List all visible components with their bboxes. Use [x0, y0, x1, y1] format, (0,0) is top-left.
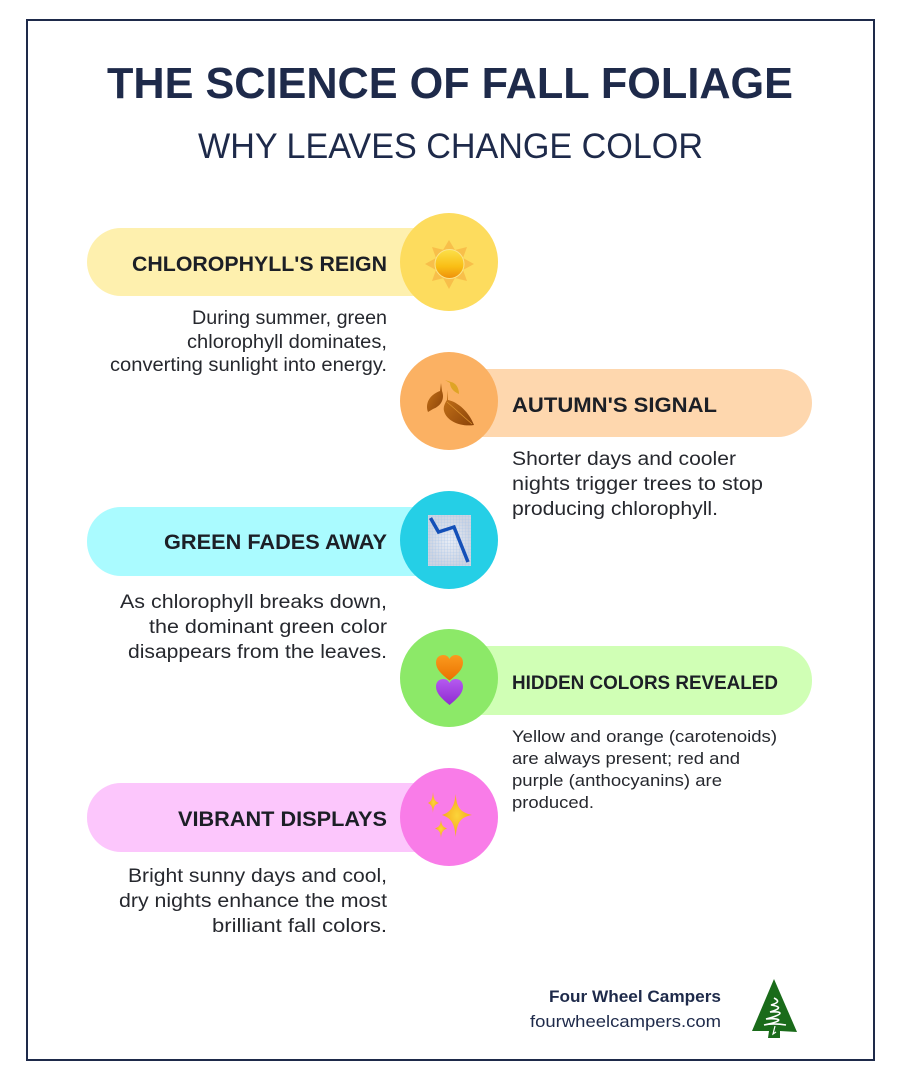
icon: sparkles [428, 792, 472, 838]
text: green fades away description: disappears from the leaves. [128, 642, 387, 663]
heading: vibrant displays: VIBRANT DISPLAYS [178, 808, 387, 831]
text: vibrant displays description [119, 866, 388, 937]
step 1: chlorophyll's reign [87, 213, 498, 376]
text: autumn's signal description: Shorter days and cooler [512, 449, 737, 470]
text: green fades away description: the dominant green color [149, 617, 388, 638]
text: hidden colors revealed description: are always present; red and [512, 749, 740, 768]
icon: fallen leaves [427, 380, 474, 425]
pill: vibrant displays [87, 783, 457, 852]
pill: hidden colors revealed [442, 646, 812, 715]
step 5: vibrant displays [87, 768, 498, 937]
icon: sun [425, 240, 474, 289]
text: chlorophyll's reign description: chlorophyll dominates, [187, 332, 387, 353]
icon: falling chart [428, 515, 471, 566]
circle: hearts badge [400, 629, 498, 727]
text: green fades away description [120, 592, 388, 663]
text: vibrant displays description: Bright sunny days and cool, [128, 866, 387, 887]
text: autumn's signal description [512, 449, 763, 520]
icon: orange and purple hearts [436, 655, 463, 705]
text: vibrant displays description: brilliant fall colors. [212, 916, 387, 937]
circle: sparkles badge [400, 768, 498, 866]
circle: chart badge [400, 491, 498, 589]
pill: green fades away [87, 507, 457, 576]
text: hidden colors revealed description: produced. [512, 793, 594, 812]
heading: green fades away: GREEN FADES AWAY [164, 531, 387, 554]
title: THE SCIENCE OF FALL FOLIAGE [107, 59, 793, 108]
heading: autumn's signal: AUTUMN'S SIGNAL [512, 394, 717, 417]
website: fourwheelcampers.com [530, 1012, 721, 1031]
pill: autumn's signal [442, 369, 812, 437]
circle: sun badge [400, 213, 498, 311]
text: green fades away description: As chlorophyll breaks down, [120, 592, 387, 613]
step 2: autumn's signal [400, 352, 812, 520]
subtitle: WHY LEAVES CHANGE COLOR [198, 127, 703, 166]
text: vibrant displays description: dry nights enhance the most [119, 891, 388, 912]
footer: brand [530, 979, 797, 1038]
heading: hidden colors revealed: HIDDEN COLORS REVEALED [512, 673, 778, 694]
text: chlorophyll's reign description: During summer, green [192, 308, 387, 329]
icon: pine tree logo [752, 979, 797, 1038]
text: hidden colors revealed description: Yellow and orange (carotenoids) [512, 727, 777, 746]
text: hidden colors revealed description: purple (anthocyanins) are [512, 771, 722, 790]
pill: chlorophyll's reign [87, 228, 457, 296]
circle: leaves badge [400, 352, 498, 450]
step 4: hidden colors revealed [400, 629, 812, 812]
text: autumn's signal description: producing chlorophyll. [512, 499, 718, 520]
heading: chlorophyll's reign: CHLOROPHYLL'S REIGN [132, 253, 387, 276]
text: chlorophyll's reign description [110, 308, 387, 376]
text: chlorophyll's reign description: converting sunlight into energy. [110, 355, 387, 376]
step 3: green fades away [87, 491, 498, 663]
brand name: Four Wheel Campers [549, 987, 721, 1006]
text: hidden colors revealed description [512, 727, 777, 812]
text: autumn's signal description: nights trigger trees to stop [512, 474, 763, 495]
